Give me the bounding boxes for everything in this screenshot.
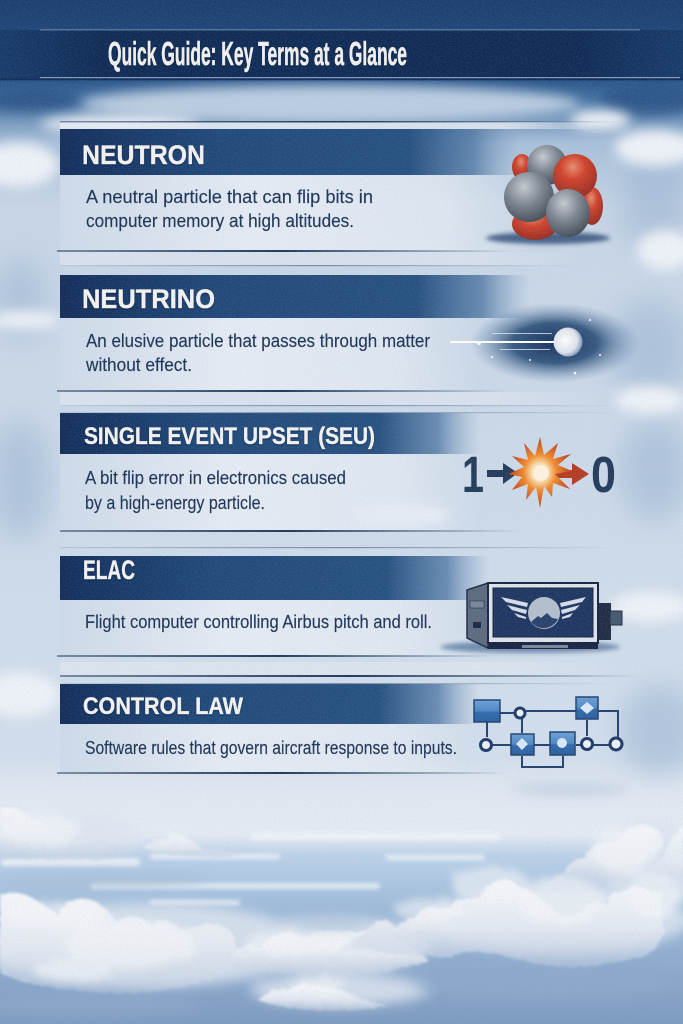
heading: control law: CONTROL LAW bbox=[83, 693, 243, 720]
heading: neutrino: NEUTRINO bbox=[82, 284, 215, 314]
icon: atom nucleus bbox=[486, 145, 610, 244]
panel: single event upset bbox=[60, 412, 620, 548]
description: control law: Software rules that govern aircraft response to inputs. bbox=[85, 737, 457, 758]
description: neutron: A neutral particle that can flip bits in bbox=[86, 186, 373, 207]
icon: bit flip burst: 1 bbox=[462, 446, 484, 503]
panel: elac bbox=[57, 555, 640, 677]
lower clouds bbox=[0, 785, 683, 1017]
description: neutron: computer memory at high altitudes. bbox=[86, 210, 354, 231]
icon: bit flip burst bbox=[462, 437, 616, 508]
icon: neutrino streak bbox=[450, 303, 640, 383]
heading: elac: ELAC bbox=[83, 555, 135, 585]
panel: neutrino bbox=[57, 275, 640, 406]
icon: bit flip burst: 0 bbox=[591, 446, 616, 503]
description: neutron bbox=[86, 186, 373, 231]
description: seu: by a high-energy particle. bbox=[85, 492, 265, 513]
title: Quick Guide: Key Terms at a Glance bbox=[108, 35, 407, 72]
description: neutrino bbox=[85, 330, 430, 375]
description: seu bbox=[85, 467, 346, 513]
description: neutrino: without effect. bbox=[85, 354, 192, 375]
description: neutrino: An elusive particle that passes through matter bbox=[86, 330, 430, 351]
title band bbox=[0, 29, 683, 80]
description: elac: Flight computer controlling Airbus pitch and roll. bbox=[85, 611, 432, 632]
icon: flight computer bbox=[440, 583, 622, 653]
panel: neutron bbox=[57, 121, 625, 266]
heading: neutron: NEUTRON bbox=[82, 140, 205, 170]
panel: control law bbox=[57, 683, 622, 774]
description: seu: A bit flip error in electronics caused bbox=[85, 467, 346, 488]
heading: seu: SINGLE EVENT UPSET (SEU) bbox=[84, 423, 375, 450]
icon: control diagram bbox=[474, 697, 622, 767]
